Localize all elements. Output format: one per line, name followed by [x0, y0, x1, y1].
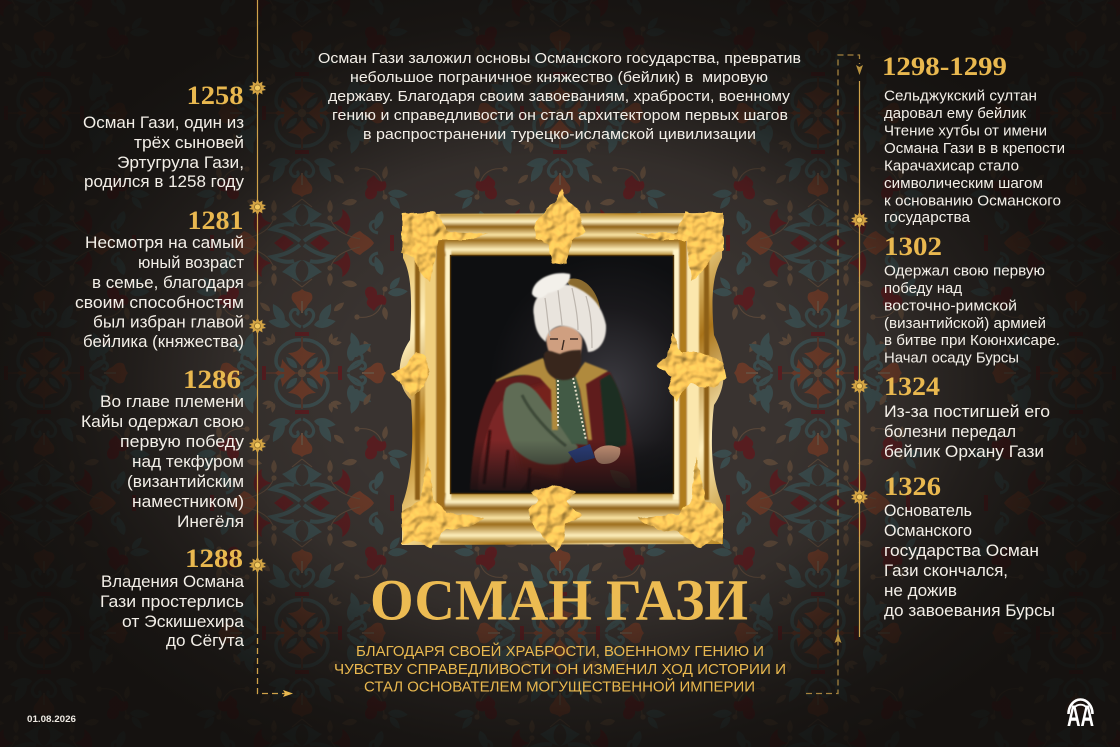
eyes: [550, 339, 578, 350]
right text block 1302: Одержал свою первую: [884, 262, 1045, 280]
right timeline lines with arrows: [806, 55, 863, 694]
right text block 1302: в битве при Коюнхисаре.: [884, 332, 1060, 349]
right text block 1298-1299: Чтение хутбы от имени: [884, 122, 1047, 140]
right text block 1324: Из-за постигшей его: [884, 402, 1050, 421]
left text block 1258: трёх сыновей: [134, 133, 244, 152]
subtitle: СТАЛ ОСНОВАТЕЛЕМ МОГУЩЕСТВЕННОЙ ИМПЕРИИ: [364, 678, 755, 696]
left text block 1286: Кайы одержал свою: [81, 412, 244, 431]
left text block 1286: [81, 365, 245, 531]
left text block 1281: Несмотря на самый: [85, 233, 244, 252]
right text block 1326: [884, 472, 1055, 620]
left text block 1286: Во главе племени: [100, 392, 244, 411]
right text block 1298-1299: Сельджукский султан: [884, 88, 1037, 104]
subtitle: [334, 642, 786, 696]
right text block 1324: болезни передал: [884, 422, 1016, 441]
frame top and bottom bevels: [415, 214, 709, 543]
left text block 1288: 1288: [185, 544, 243, 573]
intro paragraph: [318, 50, 801, 143]
right text block 1302: восточно-римской: [884, 298, 1017, 314]
left text block 1286: 1286: [183, 365, 241, 394]
left text block 1286: наместником): [132, 492, 244, 511]
icon: AA logo: AA: [1067, 700, 1094, 733]
timeline star markers: [249, 80, 868, 574]
intro paragraph: в распространении турецко-исламской цивилизации: [363, 126, 756, 143]
left text block 1288: [100, 544, 245, 650]
right text block 1298-1299: [882, 52, 1065, 226]
left text block 1286: первую победу: [120, 432, 245, 451]
right text block 1302: Начал осаду Бурсы: [884, 350, 1019, 366]
face: [546, 326, 582, 368]
intro paragraph: Осман Гази заложил основы Османского государства, превратив: [318, 50, 801, 67]
right text block 1298-1299: 1298-1299: [882, 52, 1007, 81]
right text block 1326: не дожив: [884, 581, 957, 600]
left text block 1286: (византийским: [127, 472, 244, 491]
green kaftan: [555, 376, 588, 445]
blue cuff: [568, 444, 595, 463]
intro paragraph: небольшое пограничное княжество (бейлик) в мировую: [350, 69, 768, 86]
left text block 1286: над текфуром: [132, 452, 244, 471]
intro paragraph: гению и справедливости он стал архитектором первых шагов: [332, 107, 788, 124]
right text block 1298-1299: Карачахисар стало: [884, 158, 1019, 174]
left text block 1288: до Сёгута: [166, 631, 245, 650]
frame ornaments: [392, 188, 726, 552]
green sleeve: [503, 383, 578, 465]
robe: [470, 368, 637, 492]
title: ОСМАН ГАЗИ: [370, 568, 748, 632]
left text block 1258: 1258: [186, 81, 244, 110]
gold ornate frame: [392, 188, 726, 552]
date: 01.08.2026: [27, 714, 76, 725]
left text block 1288: Гази простерлись: [100, 592, 244, 611]
left text block 1281: юный возраст: [138, 253, 244, 272]
left text block 1281: был избран главой: [93, 312, 244, 332]
gold turban cap: [566, 278, 600, 318]
left text block 1288: Владения Османа: [101, 572, 245, 591]
right text block 1302: [884, 232, 1060, 366]
icon: AA logo: [1067, 700, 1094, 733]
right text block 1298-1299: даровал ему бейлик: [884, 105, 1026, 122]
left text block 1281: бейлика (княжества): [83, 332, 244, 351]
left timeline line with arrow: [258, 0, 293, 697]
right text block 1326: 1326: [884, 472, 941, 501]
gold collar: [496, 358, 558, 430]
subtitle: БЛАГОДАРЯ СВОЕЙ ХРАБРОСТИ, ВОЕННОМУ ГЕНИЮ И: [356, 642, 764, 660]
frame body: [400, 213, 724, 545]
right text block 1298-1299: государства: [884, 209, 971, 226]
hand: [594, 445, 620, 464]
right text block 1302: победу над: [884, 280, 962, 297]
right text block 1302: (византийской) армией: [884, 315, 1046, 332]
left text block 1281: своим способностям: [75, 293, 244, 312]
left text block 1286: Инегёля: [177, 512, 244, 531]
subtitle: ЧУВСТВУ СПРАВЕДЛИВОСТИ ОН ИЗМЕНИЛ ХОД ИСТОРИИ И: [334, 662, 786, 678]
right text block 1298-1299: к основанию Османского: [884, 192, 1061, 210]
beard: [544, 350, 581, 380]
right text block 1324: [884, 372, 1050, 461]
left text block 1281: в семье, благодаря: [92, 273, 244, 292]
right text block 1326: Османского: [884, 521, 972, 540]
right text block 1326: до завоевания Бурсы: [884, 601, 1055, 620]
right text block 1326: Гази скончался,: [884, 561, 1008, 580]
right text block 1324: 1324: [884, 372, 940, 401]
frame inner edge: [450, 256, 674, 494]
left text block 1258: родился в 1258 году: [84, 172, 244, 191]
left text block 1258: Осман Гази, один из: [83, 113, 244, 132]
left text block 1281: [75, 206, 244, 351]
white turban: [533, 285, 606, 352]
right text block 1326: государства Осман: [884, 541, 1039, 560]
right text block 1326: Основатель: [884, 501, 972, 520]
painting: Osman Gazi portrait: [451, 256, 673, 493]
right text block 1298-1299: символическим шагом: [884, 175, 1043, 192]
right text block 1298-1299: Османа Гази в в крепости: [884, 140, 1065, 157]
right text block 1324: бейлик Орхану Гази: [884, 442, 1044, 461]
plume: [532, 273, 570, 298]
left text block 1281: 1281: [188, 206, 244, 235]
left text block 1288: от Эскишехира: [122, 612, 245, 631]
intro paragraph: державу. Благодаря своим завоеваниям, храбрости, военному: [328, 88, 791, 105]
left text block 1258: [83, 81, 244, 191]
left text block 1258: Эртугрула Гази,: [117, 153, 244, 172]
right text block 1302: 1302: [884, 232, 942, 261]
